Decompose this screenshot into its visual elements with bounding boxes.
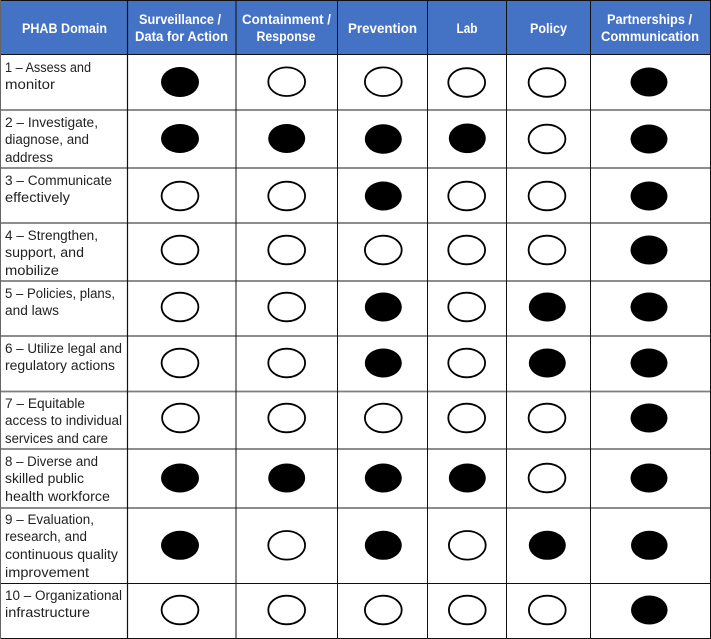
domain 2 label: address — [5, 150, 53, 165]
domain 10 label: infrastructure — [5, 605, 90, 620]
header: Containment / Response — [242, 12, 331, 44]
domain 1 label: 1 – Assess and — [5, 60, 91, 75]
domain 3 label: effectively — [5, 190, 70, 205]
domain 9 label: research, and — [5, 529, 87, 544]
row 3 markers — [162, 182, 668, 210]
header: Containment / Response: Response — [256, 29, 316, 44]
header: Prevention: Prevention — [348, 21, 417, 36]
domain 5 label: 5 – Policies, plans, — [5, 286, 115, 301]
domain 8 label: skilled public — [5, 471, 84, 486]
domain 7 label: services and care — [5, 431, 108, 446]
row 2 markers — [161, 124, 668, 154]
row 9 markers — [161, 531, 668, 560]
domain 6 label — [5, 341, 122, 373]
domain 5 label — [5, 286, 115, 318]
domain 9 label: continuous quality — [5, 547, 118, 562]
row 1 markers — [161, 67, 668, 97]
header: Surveillance / Data for Action: Surveillance / — [139, 12, 221, 27]
domain labels column — [5, 60, 122, 620]
row 10 markers — [162, 596, 668, 624]
domain 1 label: monitor — [5, 77, 56, 92]
domain 4 label: mobilize — [5, 263, 59, 278]
domain 6 label: 6 – Utilize legal and — [5, 341, 122, 356]
domain 3 label — [5, 173, 112, 205]
row 4 markers — [162, 236, 668, 264]
domain 2 label — [5, 115, 98, 165]
header: Containment / Response: Containment / — [242, 12, 331, 27]
row 5 markers — [162, 292, 668, 322]
row 8 markers — [161, 464, 668, 492]
row 7 markers — [162, 404, 668, 432]
domain 4 label: support, and — [5, 245, 84, 260]
domain 4 label: 4 – Strengthen, — [5, 228, 98, 243]
domain 7 label: access to individual — [5, 413, 122, 428]
header: Partnerships / Communication: Communication — [601, 29, 699, 44]
header row — [22, 12, 699, 44]
header: Partnerships / Communication: Partnerships / — [607, 12, 692, 27]
domain 8 label: 8 – Diverse and — [5, 454, 98, 469]
domain 10 label: 10 – Organizational — [5, 588, 122, 603]
header: Lab: Lab — [456, 21, 478, 36]
header: PHAB Domain: PHAB Domain — [22, 21, 107, 36]
header: Partnerships / Communication — [601, 12, 699, 44]
domain 4 label — [5, 228, 98, 278]
domain 7 label — [5, 396, 122, 446]
domain 2 label: 2 – Investigate, — [5, 115, 98, 130]
domain 9 label: 9 – Evaluation, — [5, 512, 94, 527]
header: Policy: Policy — [530, 21, 568, 36]
header: Surveillance / Data for Action — [135, 12, 228, 44]
domain 8 label: health workforce — [5, 489, 110, 504]
header: Surveillance / Data for Action: Data for Action — [135, 29, 228, 44]
domain 7 label: 7 – Equitable — [5, 396, 85, 411]
domain 3 label: 3 – Communicate — [5, 173, 112, 188]
domain 9 label — [5, 512, 118, 580]
domain 6 label: regulatory actions — [5, 358, 115, 373]
domain 5 label: and laws — [5, 303, 59, 318]
domain 9 label: improvement — [5, 565, 89, 580]
domain 10 label — [5, 588, 122, 620]
domain 2 label: diagnose, and — [5, 132, 89, 147]
row 6 markers — [162, 348, 668, 378]
domain 8 label — [5, 454, 110, 504]
domain 1 label — [5, 60, 91, 92]
